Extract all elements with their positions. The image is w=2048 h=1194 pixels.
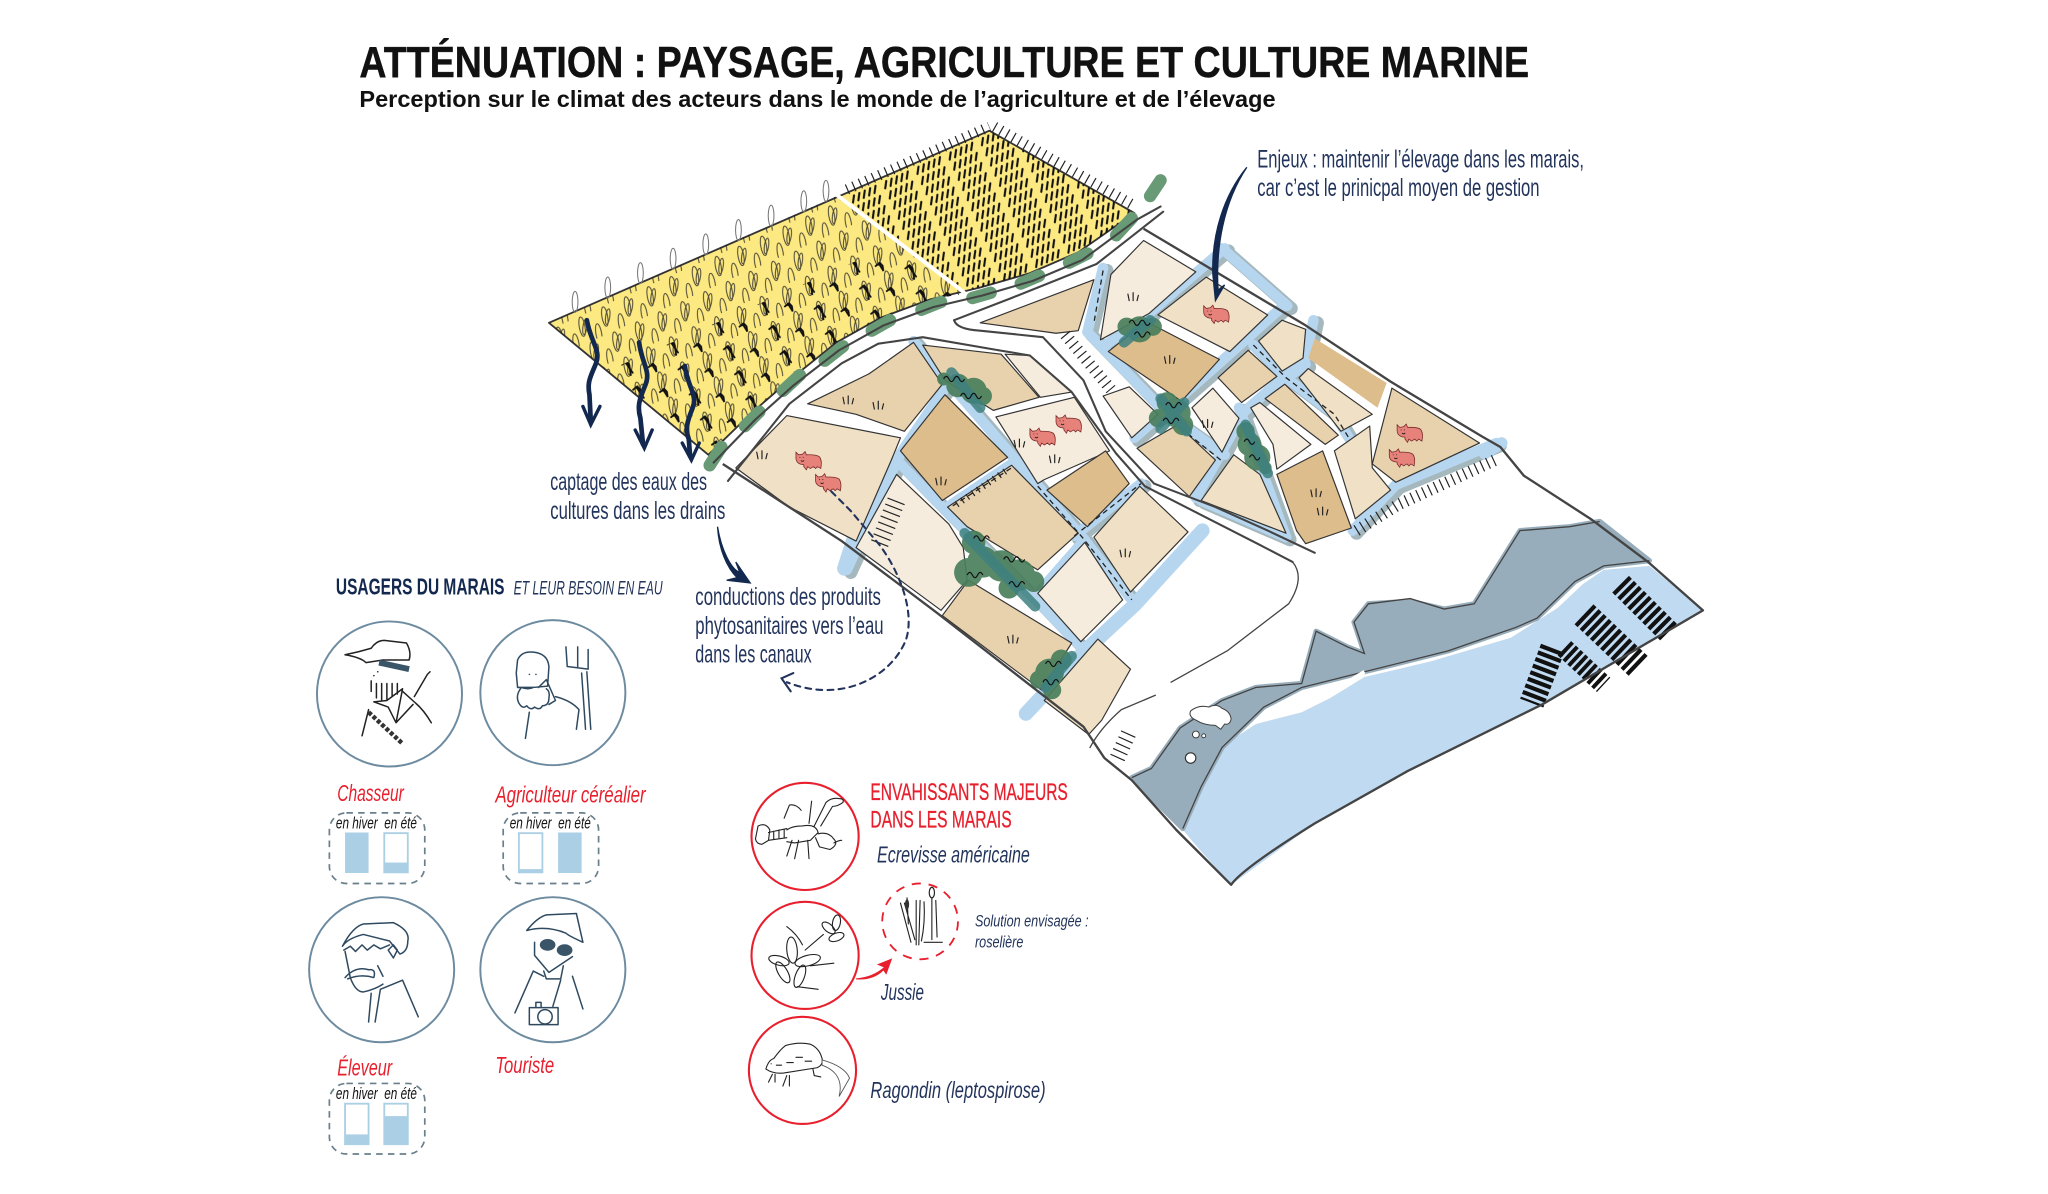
heading: envahissants majeurs: DANS LES MARAIS <box>870 806 1012 833</box>
oyster beds <box>1532 584 1670 703</box>
callout: captage: captage des eaux des <box>550 469 707 496</box>
label: éleveur with water need: Éleveur <box>337 1055 393 1081</box>
grass tufts <box>757 293 1328 643</box>
title: ATTÉNUATION : PAYSAGE, AGRICULTURE ET CULTURE MARINE <box>359 39 1529 87</box>
subtitle: Perception sur le climat des acteurs dans le monde de l’agriculture et de l’élevage <box>359 86 1276 112</box>
label: ragondin: Ragondin (leptospirose) <box>870 1077 1046 1103</box>
label: agriculteur with water need: en été <box>558 815 591 833</box>
roads <box>728 212 1315 748</box>
arrow: enjeux to cow <box>1213 167 1247 301</box>
fields: right block <box>980 240 1479 544</box>
heading: usagers du marais: ET LEUR BESOIN EN EAU <box>514 578 663 600</box>
canals <box>844 248 1502 714</box>
callout: captage: cultures dans les drains <box>550 498 725 525</box>
icon: ragondin <box>749 1017 856 1124</box>
land outline <box>723 229 1703 885</box>
label: écrevisse américaine: Ecrevisse américaine <box>877 842 1030 868</box>
callout: captage <box>550 469 725 525</box>
heading: usagers du marais: USAGERS DU MARAIS <box>336 574 505 600</box>
label: chasseur with water need <box>329 780 425 883</box>
label: jussie: Jussie <box>880 979 924 1005</box>
sea <box>1184 566 1703 885</box>
label: chasseur with water need: en hiver <box>336 815 378 833</box>
label: agriculteur with water need: Agriculteur céréalier <box>494 781 646 807</box>
icon: roselière <box>882 883 958 959</box>
label: solution envisagée: Solution envisagée : <box>975 912 1089 931</box>
icon: chasseur <box>317 621 462 767</box>
map: isometric landscape <box>549 127 1703 885</box>
label: éleveur with water need: en hiver <box>336 1085 378 1103</box>
label: solution envisagée: roselière <box>975 933 1023 952</box>
icon: agriculteur <box>480 620 625 765</box>
icon: jussie <box>752 902 859 1009</box>
road along the crop field <box>714 206 1161 463</box>
hedge along the field <box>710 180 1161 465</box>
icon: touriste <box>480 897 625 1042</box>
label: touriste: Touriste <box>495 1052 554 1078</box>
label: agriculteur with water need <box>494 781 646 883</box>
heading: envahissants majeurs: ENVAHISSANTS MAJEURS <box>870 779 1068 806</box>
label: agriculteur with water need: en hiver <box>510 815 552 833</box>
callout: enjeux: car c’est le prinicpal moyen de gestion <box>1257 175 1540 202</box>
arrow: captage to conductions <box>718 527 750 583</box>
icon: écrevisse <box>752 783 859 890</box>
mudflat <box>1132 521 1649 829</box>
cows <box>796 305 1423 492</box>
rock and pebbles on the shore <box>1185 705 1231 763</box>
icon: éleveur <box>309 897 454 1042</box>
callout: conductions <box>695 584 884 669</box>
fields: left block <box>736 342 1188 734</box>
dashed canal lines <box>953 271 1349 600</box>
arrow: jussie to roselière <box>856 959 891 979</box>
label: éleveur with water need: en été <box>384 1085 417 1103</box>
hatched grass bands <box>880 335 1495 758</box>
yellow crop field <box>549 127 1136 455</box>
label: chasseur with water need: Chasseur <box>337 780 405 806</box>
heading: envahissants majeurs <box>870 779 1068 833</box>
callout: conductions: conductions des produits <box>695 584 881 611</box>
callout: enjeux: Enjeux : maintenir l’élevage dans les marais, <box>1257 146 1584 173</box>
label: chasseur with water need: en été <box>384 815 417 833</box>
label: éleveur with water need <box>329 1055 425 1154</box>
trees <box>937 316 1272 699</box>
callout: conductions: phytosanitaires vers l’eau <box>695 613 884 640</box>
callout: enjeux <box>1257 146 1584 202</box>
dashed arrow: runoff path <box>782 491 909 691</box>
arrows: water run-off from crops <box>583 320 699 460</box>
label: solution envisagée <box>975 912 1089 952</box>
callout: conductions: dans les canaux <box>695 642 812 669</box>
